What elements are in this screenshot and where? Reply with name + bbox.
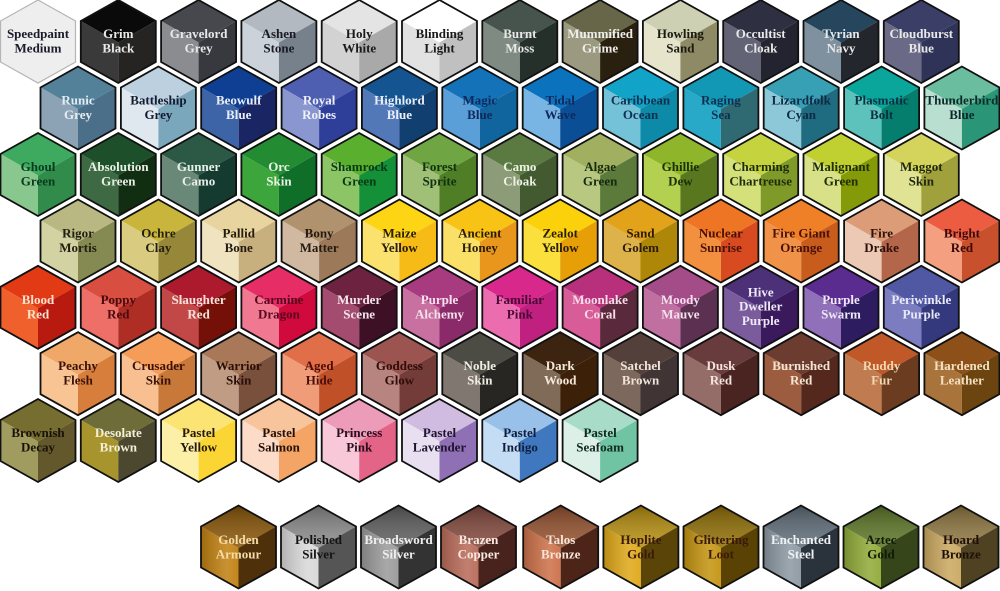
swatch: Princess Pink: Princess bbox=[336, 425, 382, 440]
swatch: Murder Scene: Murder bbox=[337, 292, 381, 307]
swatch: Hoard Bronze: Hoard bbox=[943, 532, 980, 547]
swatch: Howling Sand bbox=[643, 0, 718, 83]
swatch: Poppy Red bbox=[81, 266, 156, 349]
swatch: Caribbean Ocean: Ocean bbox=[623, 107, 659, 122]
swatch: Moody Mauve bbox=[643, 266, 718, 349]
swatch: Orc Skin: Skin bbox=[266, 174, 292, 188]
swatch: Forest Sprite: Forest bbox=[422, 159, 458, 174]
swatch: Algae Green bbox=[563, 133, 638, 216]
swatch: Peachy Flesh: Flesh bbox=[63, 373, 94, 388]
swatch: Brownish Decay: Decay bbox=[21, 440, 55, 454]
swatch: Ochre Clay: Clay bbox=[145, 240, 172, 255]
swatch: Satchel Brown: Satchel bbox=[620, 358, 661, 373]
swatch: Caribbean Ocean bbox=[603, 66, 678, 150]
swatch: Enchanted Steel: Steel bbox=[788, 546, 815, 562]
swatch: Plasmatic Bolt: Bolt bbox=[870, 107, 894, 122]
swatch: Maggot Skin: Skin bbox=[909, 174, 935, 188]
swatch: Zealot Yellow: Zealot bbox=[543, 226, 579, 240]
swatch: Burnished Red: Burnished bbox=[772, 358, 831, 373]
swatch: Aged Hide: Hide bbox=[306, 373, 333, 388]
swatch: Crusader Skin: Crusader bbox=[132, 358, 185, 373]
swatch: Moonlake Coral bbox=[563, 266, 638, 349]
swatch: Pastel Yellow: Yellow bbox=[180, 440, 218, 454]
swatch: Algae Green: Algae bbox=[584, 159, 616, 174]
swatch: Highlord Blue: Blue bbox=[387, 107, 412, 122]
swatch: Hardened Leather bbox=[924, 332, 999, 415]
swatch: Ashen Stone: Stone bbox=[263, 40, 295, 56]
swatch: Beowulf Blue bbox=[201, 66, 276, 150]
swatch: Cloudburst Blue bbox=[884, 0, 959, 83]
swatch: Ghoul Green: Ghoul bbox=[21, 159, 56, 174]
swatch: Broadsword Silver: Broadsword bbox=[364, 532, 433, 547]
swatch: Murder Scene bbox=[322, 266, 397, 349]
swatch: Fire Giant Orange bbox=[764, 200, 839, 282]
swatch: Raging Sea bbox=[683, 66, 758, 150]
swatch: Pastel Lavender bbox=[402, 399, 477, 482]
swatch: Hoplite Gold: Hoplite bbox=[620, 532, 662, 547]
swatch: Runic Grey: Grey bbox=[64, 107, 92, 122]
swatch: Gunner Camo: Gunner bbox=[177, 159, 220, 174]
swatch: Peachy Flesh: Peachy bbox=[58, 358, 98, 373]
swatch: Shamrock Green: Shamrock bbox=[331, 159, 388, 174]
swatch: Ghillie Dew bbox=[643, 133, 718, 216]
swatch: Nuclear Sunrise: Sunrise bbox=[700, 240, 742, 255]
swatch: Pastel Indigo: Indigo bbox=[502, 440, 538, 454]
swatch: Tidal Wave: Tidal bbox=[546, 92, 575, 108]
swatch: Ancient Honey: Honey bbox=[462, 240, 498, 255]
swatch: Charming Chartreuse bbox=[723, 133, 798, 216]
swatch: Bright Red bbox=[924, 200, 999, 282]
swatch: Talos Bronze bbox=[523, 506, 598, 588]
swatch: Gravelord Grey bbox=[161, 0, 236, 83]
swatch: Ruddy Fur: Ruddy bbox=[863, 358, 901, 373]
swatch: Forest Sprite: Sprite bbox=[423, 174, 457, 188]
swatch: Tidal Wave: Wave bbox=[545, 107, 576, 122]
swatch: Malignant Green bbox=[804, 133, 878, 216]
swatch: Bony Matter: Matter bbox=[300, 240, 339, 255]
swatch: Aged Hide bbox=[282, 332, 357, 415]
swatch: Golden Armour: Golden bbox=[218, 532, 259, 547]
swatch: Brazen Copper: Copper bbox=[458, 546, 500, 562]
swatch: Pastel Seafoam bbox=[563, 399, 638, 482]
swatch: Shamrock Green bbox=[322, 133, 397, 216]
swatch: Magic Blue: Magic bbox=[462, 92, 497, 108]
swatch: Dusk Red bbox=[683, 332, 758, 415]
swatch: Pastel Seafoam: Pastel bbox=[583, 425, 617, 440]
swatch: Occultist Cloak: Occultist bbox=[736, 26, 786, 41]
swatch: Pallid Bone bbox=[201, 200, 276, 282]
swatch: Raging Sea: Sea bbox=[711, 107, 731, 122]
swatch: Hoplite Gold: Gold bbox=[627, 546, 655, 562]
swatch: Purple Swarm: Purple bbox=[822, 292, 860, 307]
swatch: Tyrian Navy: Tyrian bbox=[822, 26, 860, 41]
swatch: Moody Mauve: Mauve bbox=[661, 306, 700, 321]
swatch: Murder Scene: Scene bbox=[343, 306, 375, 321]
swatch: Polished Silver bbox=[281, 506, 356, 588]
swatch: Rigor Mortis bbox=[40, 200, 116, 282]
swatch: Rigor Mortis: Rigor bbox=[62, 226, 94, 240]
swatch: Gunner Camo bbox=[161, 133, 236, 216]
swatch: Ghoul Green: Green bbox=[21, 174, 56, 188]
swatch: Blood Red: Red bbox=[27, 306, 50, 321]
swatch: Brownish Decay: Brownish bbox=[11, 425, 65, 440]
swatch: Goddess Glow: Glow bbox=[385, 373, 415, 388]
swatch: Desolate Brown: Brown bbox=[100, 440, 138, 454]
swatch: Fire Drake: Drake bbox=[864, 240, 899, 255]
swatch: Royal Robes: Royal bbox=[303, 92, 336, 108]
swatch: Burnt Moss: Moss bbox=[505, 40, 534, 56]
swatch: Orc Skin: Orc bbox=[268, 159, 290, 174]
swatch: Tidal Wave bbox=[523, 66, 598, 150]
swatch: Noble Skin: Noble bbox=[464, 358, 496, 373]
swatch: Fire Giant Orange: Fire Giant bbox=[772, 226, 831, 240]
swatch: Mummified Grime bbox=[563, 0, 638, 83]
swatch: Burnt Moss bbox=[482, 0, 557, 83]
swatch: Ochre Clay: Ochre bbox=[141, 226, 176, 240]
swatch: Dusk Red: Dusk bbox=[706, 358, 736, 373]
swatch: Gravelord Grey: Gravelord bbox=[170, 26, 228, 41]
swatch: Pallid Bone: Pallid bbox=[222, 226, 256, 240]
swatch: Burnished Red bbox=[764, 332, 839, 415]
swatch: Warrior Skin bbox=[201, 332, 276, 415]
swatch: Carmine Dragon bbox=[241, 266, 316, 349]
swatch: Aztec Gold: Gold bbox=[867, 546, 895, 562]
swatch: Enchanted Steel bbox=[764, 506, 838, 588]
swatch: Nuclear Sunrise bbox=[683, 200, 758, 282]
swatch: Ancient Honey: Ancient bbox=[458, 226, 502, 240]
swatch: Maize Yellow: Maize bbox=[382, 226, 417, 240]
swatch: Talos Bronze: Talos bbox=[546, 532, 575, 547]
swatch: Hive Dweller Purple: Hive bbox=[748, 284, 774, 299]
swatch: Camo Cloak: Camo bbox=[503, 159, 536, 174]
swatch: Bright Red: Red bbox=[951, 240, 974, 255]
swatch: Camo Cloak: Cloak bbox=[503, 174, 537, 188]
swatch: Grim Black: Black bbox=[102, 40, 135, 56]
swatch: Talos Bronze: Bronze bbox=[541, 546, 581, 562]
swatch: Pastel Salmon: Pastel bbox=[262, 425, 296, 440]
swatch: Mummified Grime: Grime bbox=[582, 40, 618, 56]
swatch: Bright Red: Bright bbox=[944, 226, 981, 240]
swatch: Carmine Dragon: Carmine bbox=[254, 292, 304, 307]
swatch: Occultist Cloak: Cloak bbox=[744, 40, 778, 56]
swatch: Zealot Yellow bbox=[523, 200, 598, 282]
swatch: Glittering Loot: Loot bbox=[708, 546, 735, 562]
swatch: Desolate Brown: Desolate bbox=[95, 425, 142, 440]
swatch: Hive Dweller Purple: Dweller bbox=[739, 298, 783, 313]
swatch: Princess Pink bbox=[322, 399, 397, 482]
swatch: Poppy Red: Red bbox=[107, 306, 130, 321]
swatch: Maggot Skin: Maggot bbox=[900, 159, 943, 174]
swatch: Ashen Stone bbox=[241, 0, 316, 83]
swatch: Slaughter Red: Slaughter bbox=[172, 292, 226, 307]
swatch: Gravelord Grey: Grey bbox=[185, 40, 213, 56]
swatch: Familiar Pink: Pink bbox=[507, 306, 534, 321]
swatch: Hive Dweller Purple: Purple bbox=[742, 313, 780, 328]
swatch: Lizardfolk Cyan: Cyan bbox=[786, 107, 817, 122]
swatch: Beowulf Blue: Beowulf bbox=[216, 92, 262, 108]
swatch: Goddess Glow: Goddess bbox=[376, 358, 423, 373]
swatch: Blinding Light: Blinding bbox=[416, 26, 464, 41]
swatch: Charming Chartreuse: Chartreuse bbox=[729, 174, 792, 188]
swatch: Grim Black: Grim bbox=[103, 26, 134, 41]
swatch: Noble Skin: Skin bbox=[467, 373, 493, 388]
swatch: Broadsword Silver: Silver bbox=[382, 546, 415, 562]
swatch: Thunderbird Blue: Thunderbird bbox=[925, 92, 999, 108]
swatch: Cloudburst Blue: Blue bbox=[909, 40, 934, 56]
swatch: Purple Swarm: Swarm bbox=[821, 306, 861, 321]
swatch: Sand Golem: Sand bbox=[626, 226, 655, 240]
swatch: Hardened Leather: Hardened bbox=[934, 358, 990, 373]
swatch: Ruddy Fur: Fur bbox=[871, 373, 892, 388]
swatch: Dark Wood: Dark bbox=[546, 358, 575, 373]
swatch: Runic Grey: Runic bbox=[61, 92, 95, 108]
swatch: Magic Blue bbox=[442, 66, 517, 150]
swatch: Speedpaint Medium bbox=[0, 0, 76, 83]
swatch: Plasmatic Bolt: Plasmatic bbox=[855, 92, 909, 108]
swatch: Hoard Bronze: Bronze bbox=[941, 546, 981, 562]
swatch: Ghoul Green bbox=[0, 133, 76, 216]
swatch: Pastel Lavender: Pastel bbox=[423, 425, 456, 440]
swatch: Pastel Lavender: Lavender bbox=[413, 440, 466, 454]
swatch: Royal Robes: Robes bbox=[302, 107, 336, 122]
swatch: Familiar Pink: Familiar bbox=[496, 292, 544, 307]
swatch: Holy White bbox=[322, 0, 397, 83]
swatch: Fire Drake: Fire bbox=[870, 226, 893, 240]
swatch: Polished Silver: Polished bbox=[295, 532, 343, 547]
swatch: Glittering Loot: Glittering bbox=[694, 532, 749, 547]
swatch: Crusader Skin: Skin bbox=[146, 373, 172, 388]
swatch: Carmine Dragon: Dragon bbox=[258, 306, 301, 321]
swatch: Dark Wood: Wood bbox=[544, 373, 577, 388]
swatch: Purple Alchemy bbox=[402, 266, 477, 349]
swatch: Brownish Decay bbox=[0, 399, 76, 482]
swatch: Golden Armour bbox=[201, 506, 276, 588]
swatch: Mummified Grime: Mummified bbox=[567, 26, 634, 41]
swatch: Brazen Copper: Brazen bbox=[459, 532, 499, 547]
swatch: Grim Black bbox=[81, 0, 156, 83]
swatch: Thunderbird Blue: Blue bbox=[949, 107, 975, 122]
swatch: Rigor Mortis: Mortis bbox=[59, 240, 97, 255]
swatch: Caribbean Ocean: Caribbean bbox=[611, 92, 671, 108]
swatch: Tyrian Navy: Navy bbox=[827, 40, 856, 56]
swatch: Moody Mauve: Moody bbox=[661, 292, 700, 307]
swatch: Cloudburst Blue: Cloudburst bbox=[890, 26, 954, 41]
swatch: Blinding Light bbox=[402, 0, 477, 83]
swatch: Fire Giant Orange: Orange bbox=[780, 240, 822, 255]
swatch: Pastel Indigo bbox=[482, 399, 557, 482]
swatch: Warrior Skin: Warrior bbox=[216, 358, 262, 373]
swatch: Goddess Glow bbox=[362, 332, 437, 415]
swatch: Hive Dweller Purple bbox=[723, 266, 798, 349]
swatch: Bony Matter: Bony bbox=[305, 226, 334, 240]
swatch: Desolate Brown bbox=[81, 399, 156, 482]
swatch: Slaughter Red: Red bbox=[187, 306, 211, 321]
swatch: Speedpaint Medium: Speedpaint bbox=[7, 26, 70, 41]
swatch: Battleship Grey: Grey bbox=[144, 107, 173, 122]
swatch: Zealot Yellow: Yellow bbox=[542, 240, 579, 255]
swatch: Polished Silver: Silver bbox=[302, 546, 335, 562]
swatch: Satchel Brown bbox=[603, 332, 678, 415]
swatch: Pallid Bone: Bone bbox=[225, 240, 253, 255]
swatch: Sand Golem: Golem bbox=[622, 240, 659, 255]
swatch: Blood Red: Blood bbox=[22, 292, 55, 307]
swatch: Howling Sand: Howling bbox=[657, 26, 704, 41]
swatch: Burnt Moss: Burnt bbox=[503, 26, 537, 41]
swatch: Poppy Red: Poppy bbox=[101, 292, 136, 307]
swatch: Ochre Clay bbox=[121, 200, 196, 282]
swatch: Princess Pink: Pink bbox=[346, 440, 373, 454]
swatch: Raging Sea: Raging bbox=[701, 92, 741, 108]
swatch: Runic Grey bbox=[40, 66, 116, 150]
swatch: Pastel Indigo: Pastel bbox=[503, 425, 537, 440]
swatch: Royal Robes bbox=[282, 66, 357, 150]
swatch: Forest Sprite bbox=[402, 133, 477, 216]
swatch: Ashen Stone: Ashen bbox=[262, 26, 297, 41]
swatch: Hoard Bronze bbox=[924, 506, 998, 588]
swatch: Speedpaint Medium: Medium bbox=[15, 40, 62, 56]
swatch: Pastel Yellow bbox=[161, 399, 236, 482]
swatch: Holy White: White bbox=[342, 40, 376, 56]
swatch: Pastel Seafoam: Seafoam bbox=[576, 440, 624, 454]
swatch: Charming Chartreuse: Charming bbox=[732, 159, 790, 174]
swatch: Dusk Red: Red bbox=[710, 373, 733, 388]
swatch: Pastel Yellow: Pastel bbox=[182, 425, 216, 440]
swatch: Tyrian Navy bbox=[804, 0, 878, 83]
swatch: Battleship Grey: Battleship bbox=[130, 92, 187, 108]
swatch: Highlord Blue: Highlord bbox=[374, 92, 425, 108]
swatch: Ancient Honey bbox=[442, 200, 517, 282]
swatch: Nuclear Sunrise: Nuclear bbox=[699, 226, 743, 240]
swatch: Ghillie Dew: Ghillie bbox=[662, 159, 699, 174]
swatch: Malignant Green: Malignant bbox=[812, 159, 871, 174]
swatch: Satchel Brown: Brown bbox=[622, 373, 660, 388]
swatch: Pastel Salmon: Salmon bbox=[258, 440, 301, 454]
swatch: Camo Cloak bbox=[482, 133, 557, 216]
swatch: Malignant Green: Green bbox=[824, 174, 859, 188]
swatch: Absolution Green bbox=[81, 133, 156, 216]
swatch: Aztec Gold: Aztec bbox=[865, 532, 897, 547]
swatch: Gunner Camo: Camo bbox=[182, 174, 215, 188]
swatch: Plasmatic Bolt bbox=[844, 66, 919, 150]
swatch: Broadsword Silver bbox=[361, 506, 436, 588]
swatch: Lizardfolk Cyan bbox=[764, 66, 839, 150]
swatch: Occultist Cloak bbox=[723, 0, 798, 83]
swatch: Glittering Loot bbox=[684, 506, 758, 588]
swatch: Maize Yellow bbox=[362, 200, 437, 282]
swatch: Peachy Flesh bbox=[40, 332, 116, 415]
swatch: Purple Swarm bbox=[804, 266, 878, 349]
swatch: Familiar Pink bbox=[482, 266, 557, 349]
swatch: Moonlake Coral: Moonlake bbox=[572, 292, 628, 307]
swatch: Maize Yellow: Yellow bbox=[381, 240, 418, 255]
swatch: Hoplite Gold bbox=[603, 506, 678, 588]
panel: metallic colours row bbox=[201, 506, 998, 588]
swatch: Hardened Leather: Leather bbox=[940, 373, 984, 388]
swatch: Howling Sand: Sand bbox=[666, 40, 695, 56]
swatch: Holy White: Holy bbox=[346, 26, 373, 41]
swatch: Pastel Salmon bbox=[241, 399, 316, 482]
swatch: Absolution Green: Absolution bbox=[88, 159, 149, 174]
swatch: Periwinkle Purple: Purple bbox=[903, 306, 940, 321]
swatch: Slaughter Red bbox=[161, 266, 236, 349]
swatch: Sand Golem bbox=[603, 200, 678, 282]
swatch: Maggot Skin bbox=[884, 133, 959, 216]
swatch: Purple Alchemy: Alchemy bbox=[415, 306, 465, 321]
swatch: Absolution Green: Green bbox=[101, 174, 136, 188]
swatch: Enchanted Steel: Enchanted bbox=[771, 532, 832, 547]
swatch: Aged Hide: Aged bbox=[305, 358, 334, 373]
swatch: Blinding Light: Light bbox=[424, 40, 455, 56]
swatch: Ruddy Fur bbox=[844, 332, 919, 415]
swatch: Aztec Gold bbox=[844, 506, 918, 588]
swatch: Purple Alchemy: Purple bbox=[421, 292, 459, 307]
swatch: Thunderbird Blue bbox=[924, 66, 999, 150]
swatch: Ghillie Dew: Dew bbox=[668, 174, 693, 188]
swatch: Shamrock Green: Green bbox=[342, 174, 377, 188]
swatch: Moonlake Coral: Coral bbox=[584, 306, 616, 321]
swatch: Dark Wood bbox=[523, 332, 598, 415]
swatch: Beowulf Blue: Blue bbox=[226, 107, 252, 122]
swatch: Brazen Copper bbox=[441, 506, 516, 588]
swatch: Crusader Skin bbox=[121, 332, 196, 415]
swatch: Periwinkle Purple bbox=[884, 266, 959, 349]
swatch: Noble Skin bbox=[442, 332, 517, 415]
swatch: Warrior Skin: Skin bbox=[226, 373, 252, 388]
swatch: Lizardfolk Cyan: Lizardfolk bbox=[772, 92, 832, 108]
swatch: Periwinkle Purple: Periwinkle bbox=[891, 292, 951, 307]
swatch: Bony Matter bbox=[282, 200, 357, 282]
swatch: Battleship Grey bbox=[121, 66, 196, 150]
swatch: Orc Skin bbox=[241, 133, 316, 216]
swatch: Magic Blue: Blue bbox=[467, 107, 493, 122]
swatch: Blood Red bbox=[0, 266, 76, 349]
swatch: Algae Green: Green bbox=[583, 174, 618, 188]
swatch: Golden Armour: Armour bbox=[216, 546, 261, 562]
swatch: Highlord Blue bbox=[362, 66, 437, 150]
swatch: Burnished Red: Red bbox=[790, 373, 813, 388]
swatch: Fire Drake bbox=[844, 200, 919, 282]
